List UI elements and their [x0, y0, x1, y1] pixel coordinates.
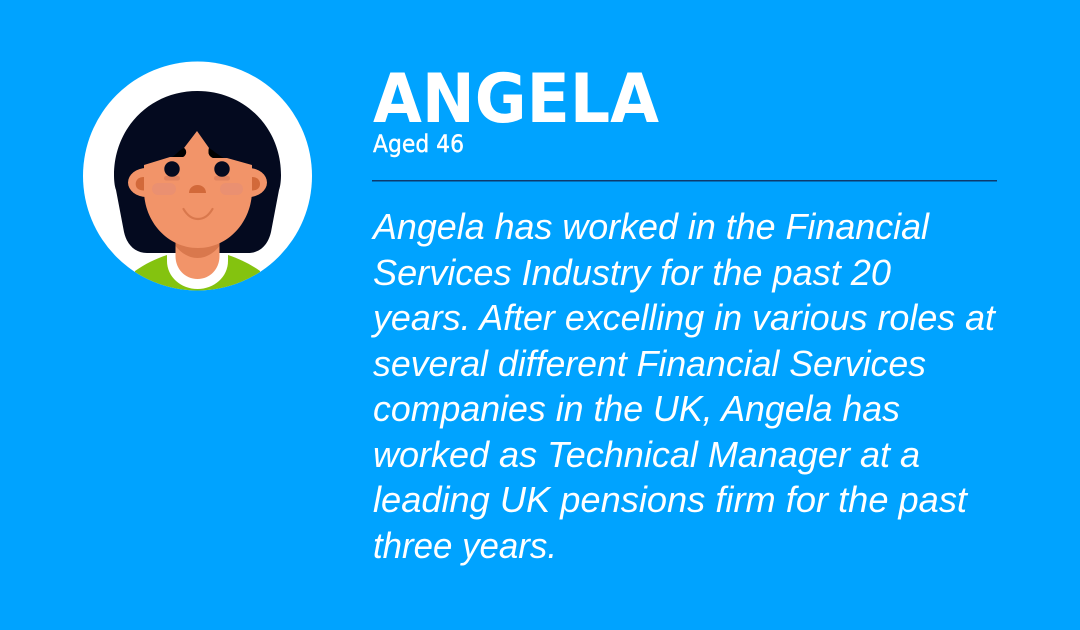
fringe curls — [172, 148, 186, 157]
hair — [114, 91, 281, 253]
text block: biography: leading UK pensions firm for the past — [373, 479, 969, 520]
icon: Angela avatar — [83, 62, 312, 300]
cheeks — [152, 183, 176, 195]
text block: biography — [370, 206, 997, 566]
text block: biography: three years. — [373, 525, 557, 566]
ears — [128, 168, 144, 197]
divider line — [372, 180, 997, 182]
text block: biography: companies in the UK, Angela has — [373, 388, 900, 429]
neck — [176, 246, 220, 279]
heading: name: ANGELA — [373, 60, 659, 139]
neck shadow — [176, 243, 220, 258]
text block: biography: years. After excelling in various roles at — [370, 297, 997, 338]
text block: biography: Angela has worked in the Financial — [371, 206, 930, 247]
shirt — [135, 255, 260, 290]
inner ears — [136, 177, 144, 190]
collar — [167, 255, 228, 289]
mouth — [184, 209, 212, 219]
text block: biography: Services Industry for the past 20 — [373, 252, 891, 293]
text: age: Aged 46 — [373, 130, 464, 158]
face — [144, 131, 252, 248]
eyes — [164, 176, 180, 180]
text block: biography: worked as Technical Manager at a — [373, 434, 920, 475]
nose — [189, 185, 206, 193]
text block: biography: several different Financial Services — [373, 343, 926, 384]
